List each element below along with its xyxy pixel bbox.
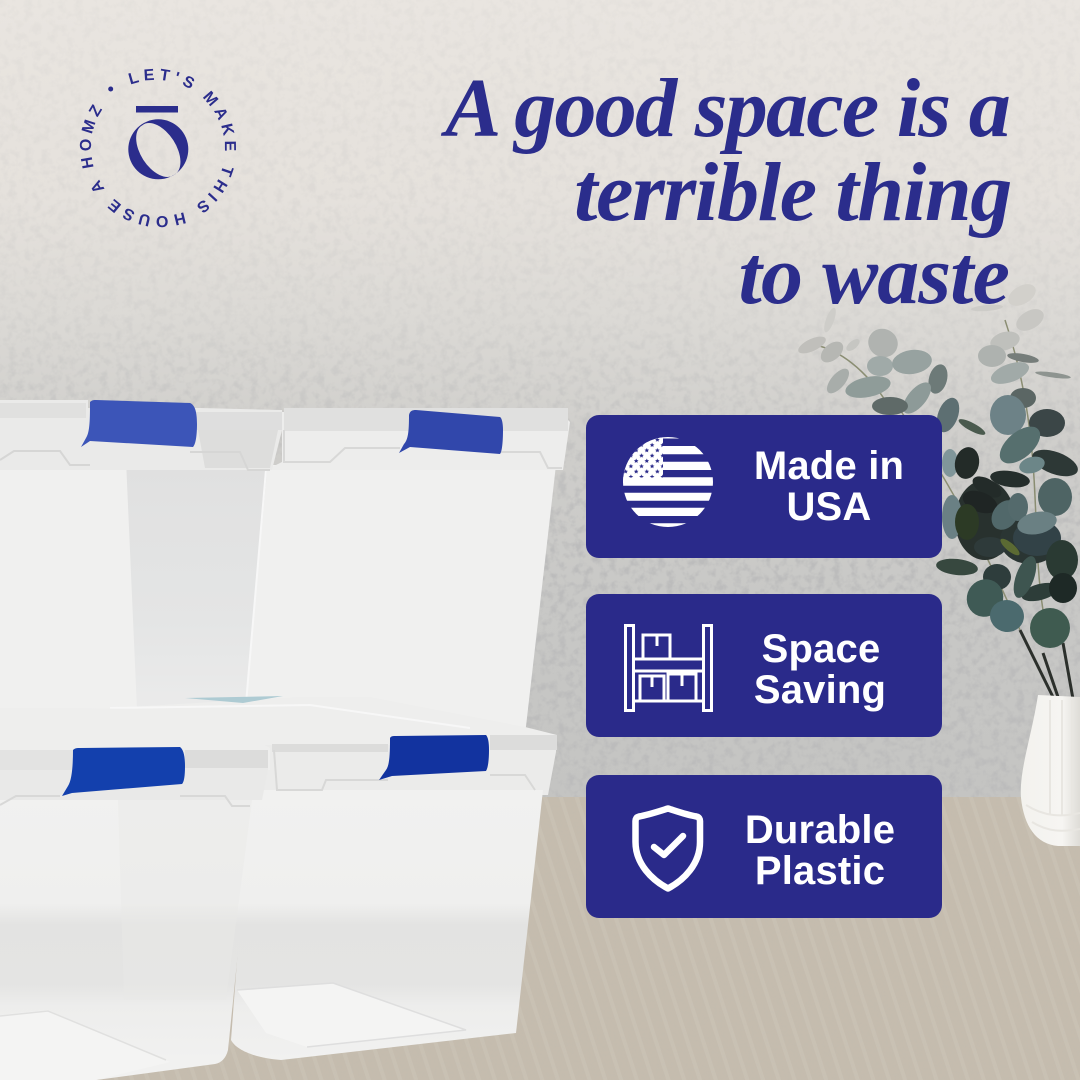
badge text: Space xyxy=(762,627,880,671)
badge text: Plastic xyxy=(755,849,885,893)
stacked clear storage boxes xyxy=(0,400,570,1080)
blue latch xyxy=(81,400,197,447)
box: bottom right xyxy=(110,696,557,1060)
title line 3: to waste xyxy=(739,229,1009,322)
blue latch xyxy=(62,747,185,796)
carpet floor xyxy=(0,797,1080,1080)
plant with eucalyptus leaves xyxy=(796,280,1080,699)
badge: Durable Plastic xyxy=(586,775,942,918)
logo mark: o xyxy=(128,119,188,179)
stems xyxy=(815,320,1073,699)
title line 1: A good space is a xyxy=(440,62,1009,155)
icon: american flag circle xyxy=(623,430,713,529)
logo mark: macron xyxy=(136,106,178,112)
wall background xyxy=(0,0,1080,800)
badge text: Made in xyxy=(754,444,904,488)
box: top right xyxy=(244,408,570,735)
box: top left xyxy=(0,400,282,727)
title line 2: terrible thing xyxy=(574,146,1011,239)
blue latch xyxy=(379,735,489,780)
dense lower leaves xyxy=(932,395,1080,648)
logo ring text: LET'S MAKE THIS HOUSE A HOMZ xyxy=(80,68,236,228)
title xyxy=(440,62,1011,322)
icon: warehouse shelf with boxes xyxy=(626,626,712,710)
logo: circular badge xyxy=(80,68,236,228)
logo ring dot xyxy=(108,86,113,92)
badge text: Saving xyxy=(754,668,886,712)
box: bottom left xyxy=(0,708,270,1080)
white vase xyxy=(1021,695,1080,846)
badge text: Durable xyxy=(745,808,895,852)
blue latch xyxy=(399,410,503,454)
faded upper leaves xyxy=(796,280,1071,418)
badge: Made in USA xyxy=(586,415,942,558)
badge text: USA xyxy=(786,485,872,529)
icon: shield with check xyxy=(636,808,700,888)
badge: Space Saving xyxy=(586,594,942,737)
